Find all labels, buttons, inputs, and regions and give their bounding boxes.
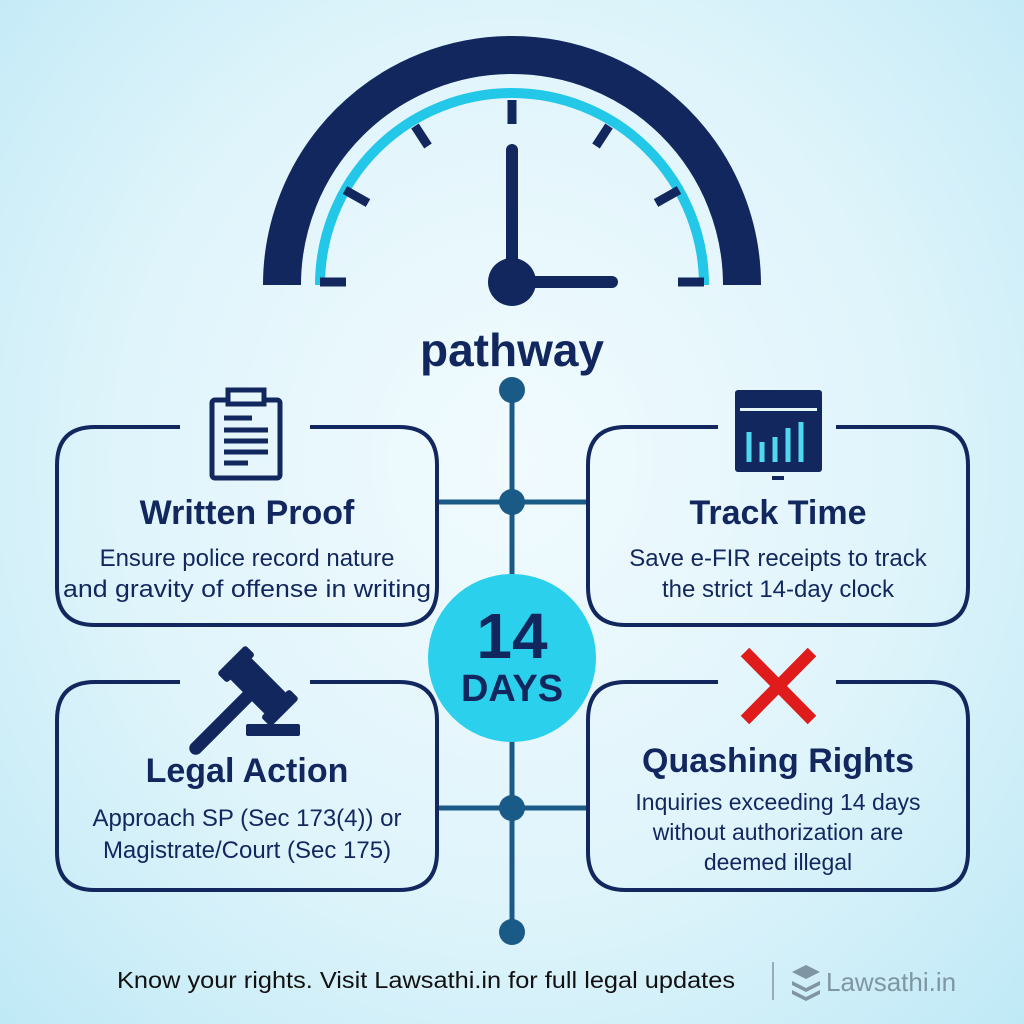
panel: quashing rights [588,652,968,890]
panel: written proof [57,390,437,625]
panel: legal action: Legal Action [146,752,348,790]
badge: 14 days: DAYS [461,668,563,710]
icon: red cross [745,652,812,720]
icon: clipboard [212,390,280,478]
logo: Lawsathi.in [826,967,956,997]
timeline spine [437,377,588,945]
icon: gavel [169,645,300,775]
panel: quashing rights: Inquiries exceeding 14 days [635,789,921,815]
panel: track time: the strict 14-day clock [662,576,895,603]
panel: written proof: Ensure police record nature [100,545,394,572]
panel: track time: Save e-FIR receipts to track [629,545,928,572]
title: pathway [420,324,604,376]
badge: 14 days [428,574,596,742]
panel: track time [588,390,968,625]
icon: clock [282,55,742,306]
panel: written proof: and gravity of offense in writing [63,576,431,603]
panel: track time: Track Time [689,494,867,532]
panel: written proof: Written Proof [140,494,355,532]
icon: monitor chart [735,390,822,480]
panel: legal action [57,645,437,890]
panel: quashing rights: without authorization are [652,819,903,845]
panel: quashing rights: deemed illegal [704,849,852,875]
badge: 14 days: 14 [476,600,548,672]
logo [792,965,956,1001]
footer text: Know your rights. Visit Lawsathi.in for full legal updates [117,967,735,993]
panel: legal action: Magistrate/Court (Sec 175) [103,837,391,864]
panel: quashing rights: Quashing Rights [642,742,914,780]
panel: legal action: Approach SP (Sec 173(4)) or [92,805,402,832]
